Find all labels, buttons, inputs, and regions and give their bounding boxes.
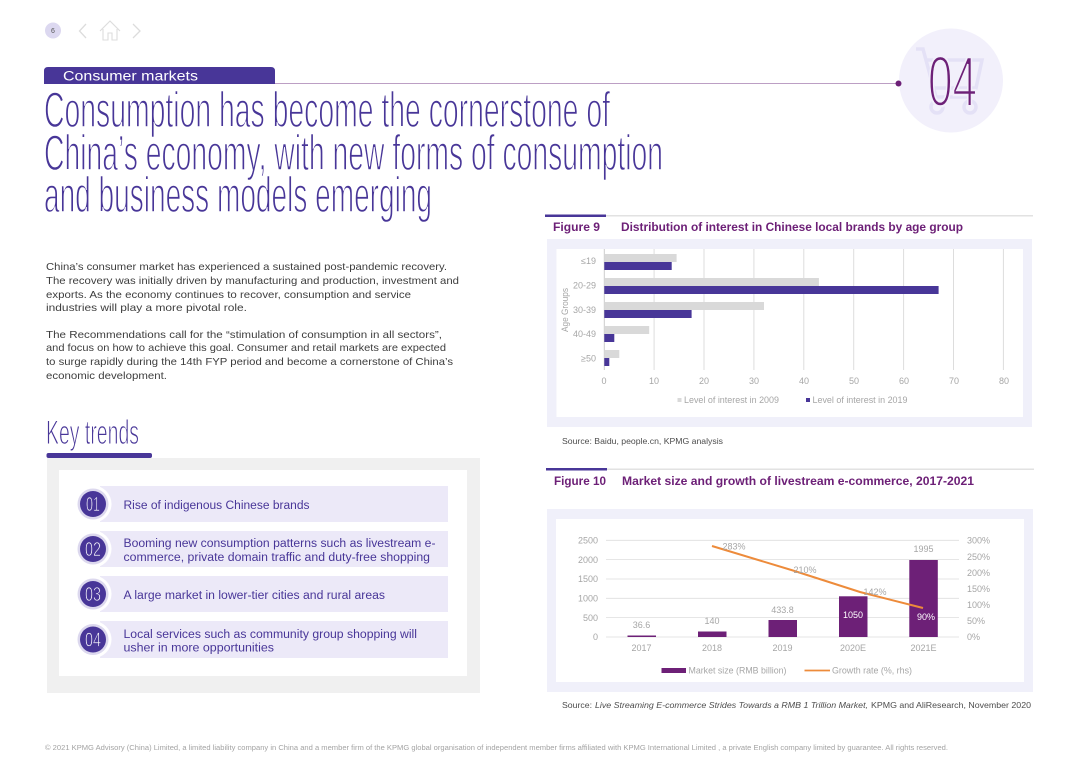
trend 02: commerce, private domain traffic and duty-free shopping (124, 552, 430, 564)
year labels: 2020E (840, 643, 866, 653)
line: growth rate (712, 546, 923, 608)
value axis labels: 80 (999, 376, 1009, 386)
left axis labels: 0 (593, 632, 598, 642)
right axis labels: 200% (967, 568, 990, 578)
figure 10 heading: Figure 10 (554, 474, 606, 488)
trend 04: Local services such as community group shopping will (124, 629, 417, 641)
footer: © 2021 KPMG Advisory (China) Limited, a limited liability company in China and a member firm of the KPMG global organisation of independent member firms affiliated with KPMG International Limited , a private English company limited by guarantee. All rights reserved. (45, 744, 948, 752)
right axis labels: 150% (967, 584, 990, 594)
right axis labels: 50% (967, 616, 985, 626)
trend 01 (74, 486, 448, 522)
year labels (631, 643, 937, 653)
age group labels: 30-39 (573, 305, 596, 315)
icon: previous arrow (80, 24, 86, 38)
section tab (44, 67, 275, 84)
grid lines (654, 249, 1003, 370)
value axis labels: 30 (749, 376, 759, 386)
trend 03 (74, 576, 448, 612)
right axis labels: 300% (967, 536, 990, 546)
data labels: 142% (863, 587, 887, 597)
data labels (633, 542, 934, 630)
panel: figure 10 combo chart: 90% (917, 612, 935, 622)
data labels: 140 (704, 616, 720, 626)
page number badge: 6 (51, 28, 55, 35)
legend: Level of interest in 2009 (684, 395, 779, 405)
trend 04: 04 (85, 630, 101, 652)
panel: figure 10 combo chart: 1050 (843, 610, 863, 620)
legend: Growth rate (%, rhs) (832, 666, 912, 676)
connector line to section badge (275, 80, 902, 86)
panel: figure 9 bar chart (547, 239, 1032, 427)
data labels: 433.8 (771, 605, 794, 615)
figure 9 heading (545, 214, 1033, 234)
title: Consumption has become the cornerstone of (44, 82, 610, 138)
axis title: Age Groups (560, 288, 570, 332)
intro text: The recovery was initially driven by manufacturing and production, investment and (46, 275, 459, 287)
year labels: 2017 (631, 643, 652, 653)
trend 03: A large market in lower-tier cities and rural areas (124, 590, 385, 602)
age group labels: 40-49 (573, 329, 596, 339)
right axis labels: 250% (967, 552, 990, 562)
icon: home (100, 21, 120, 40)
age group labels: ≥50 (581, 354, 596, 364)
grid lines (606, 540, 959, 637)
value axis labels: 0 (601, 376, 607, 386)
value axis labels: 70 (949, 376, 959, 386)
bars: level of interest in 2019 (604, 262, 939, 366)
trend 01: Rise of indigenous Chinese brands (124, 500, 310, 512)
left axis labels: 2000 (578, 555, 598, 565)
navigation bar (45, 21, 140, 40)
trend 02 (74, 530, 448, 568)
age group labels (573, 256, 596, 364)
figure 9 heading: Figure 9 (553, 220, 600, 234)
left axis labels: 1500 (578, 574, 598, 584)
value axis labels: 10 (649, 376, 659, 386)
legend (678, 395, 908, 405)
intro text: industries will play a more pivotal role. (46, 302, 247, 314)
value axis labels: 40 (799, 376, 809, 386)
panel: figure 10 combo chart (547, 509, 1033, 692)
section tab: Consumer markets (63, 68, 198, 84)
value axis labels: 60 (899, 376, 909, 386)
bars: market size (628, 560, 938, 637)
legend: Level of interest in 2019 (812, 395, 908, 405)
data labels: 1995 (913, 544, 934, 554)
right axis labels: 0% (967, 632, 980, 642)
section number: 04 (928, 43, 977, 122)
data labels: 210% (793, 565, 817, 575)
intro text: and focus on how to achieve this goal. Consumer and retail markets are expected (46, 342, 446, 354)
left axis labels: 1000 (578, 594, 598, 604)
title (44, 82, 663, 223)
icon: next arrow (133, 24, 140, 38)
trend 03: 03 (85, 584, 101, 606)
year labels: 2018 (702, 643, 722, 653)
age group labels: ≤19 (581, 256, 596, 266)
figure 10 heading (546, 468, 1034, 488)
legend: Market size (RMB billion) (688, 666, 786, 676)
trend 02: Booming new consumption patterns such as livestream e- (124, 538, 436, 550)
title: and business models emerging (44, 167, 432, 223)
figure 9 heading: Distribution of interest in Chinese local brands by age group (621, 220, 963, 234)
figure 9 source: Source: Baidu, people.cn, KPMG analysis (562, 436, 724, 446)
year labels: 2019 (772, 643, 793, 653)
bars: level of interest in 2009 (604, 254, 819, 358)
intro text (46, 261, 459, 382)
legend (662, 666, 912, 676)
value axis labels (601, 376, 1009, 386)
year labels: 2021E (910, 643, 937, 653)
heading: key trends (46, 414, 152, 458)
left axis labels: 2500 (578, 536, 598, 546)
intro text: economic development. (46, 370, 167, 382)
intro text: exports. As the economy continues to recover, consumption and service (46, 289, 411, 301)
data labels: 283% (722, 542, 746, 552)
figure 10 source: Source: (562, 700, 592, 710)
intro text: The Recommendations call for the “stimulation of consumption in all sectors”, (46, 329, 442, 341)
figure 10 source: Live Streaming E-commerce Strides Towards a RMB 1 Trillion Market, (595, 700, 868, 710)
trend 04: usher in more opportunities (124, 642, 274, 654)
value axis labels: 20 (699, 376, 709, 386)
panel: key trends (47, 458, 480, 693)
heading: key trends: Key trends (46, 414, 139, 452)
value axis labels: 50 (849, 376, 859, 386)
trend 04 (74, 621, 448, 658)
intro text: China’s consumer market has experienced a sustained post-pandemic recovery. (46, 261, 447, 273)
trend 01: 01 (86, 494, 100, 516)
icon: shopping cart (916, 49, 982, 113)
left axis labels (578, 536, 598, 642)
age group labels: 20-29 (573, 280, 596, 290)
left axis labels: 500 (583, 613, 598, 623)
right axis labels (967, 536, 990, 642)
section number badge (899, 28, 1003, 132)
figure 10 source: KPMG and AliResearch, November 2020 (871, 700, 1031, 710)
right axis labels: 100% (967, 600, 990, 610)
trend 02: 02 (85, 539, 101, 561)
data labels: 36.6 (633, 620, 650, 630)
intro text: to surge rapidly during the 14th FYP period and become a cornerstone of China’s (46, 356, 453, 368)
figure 10 heading: Market size and growth of livestream e-commerce, 2017-2021 (622, 474, 974, 488)
figure 10 source (562, 700, 1031, 710)
